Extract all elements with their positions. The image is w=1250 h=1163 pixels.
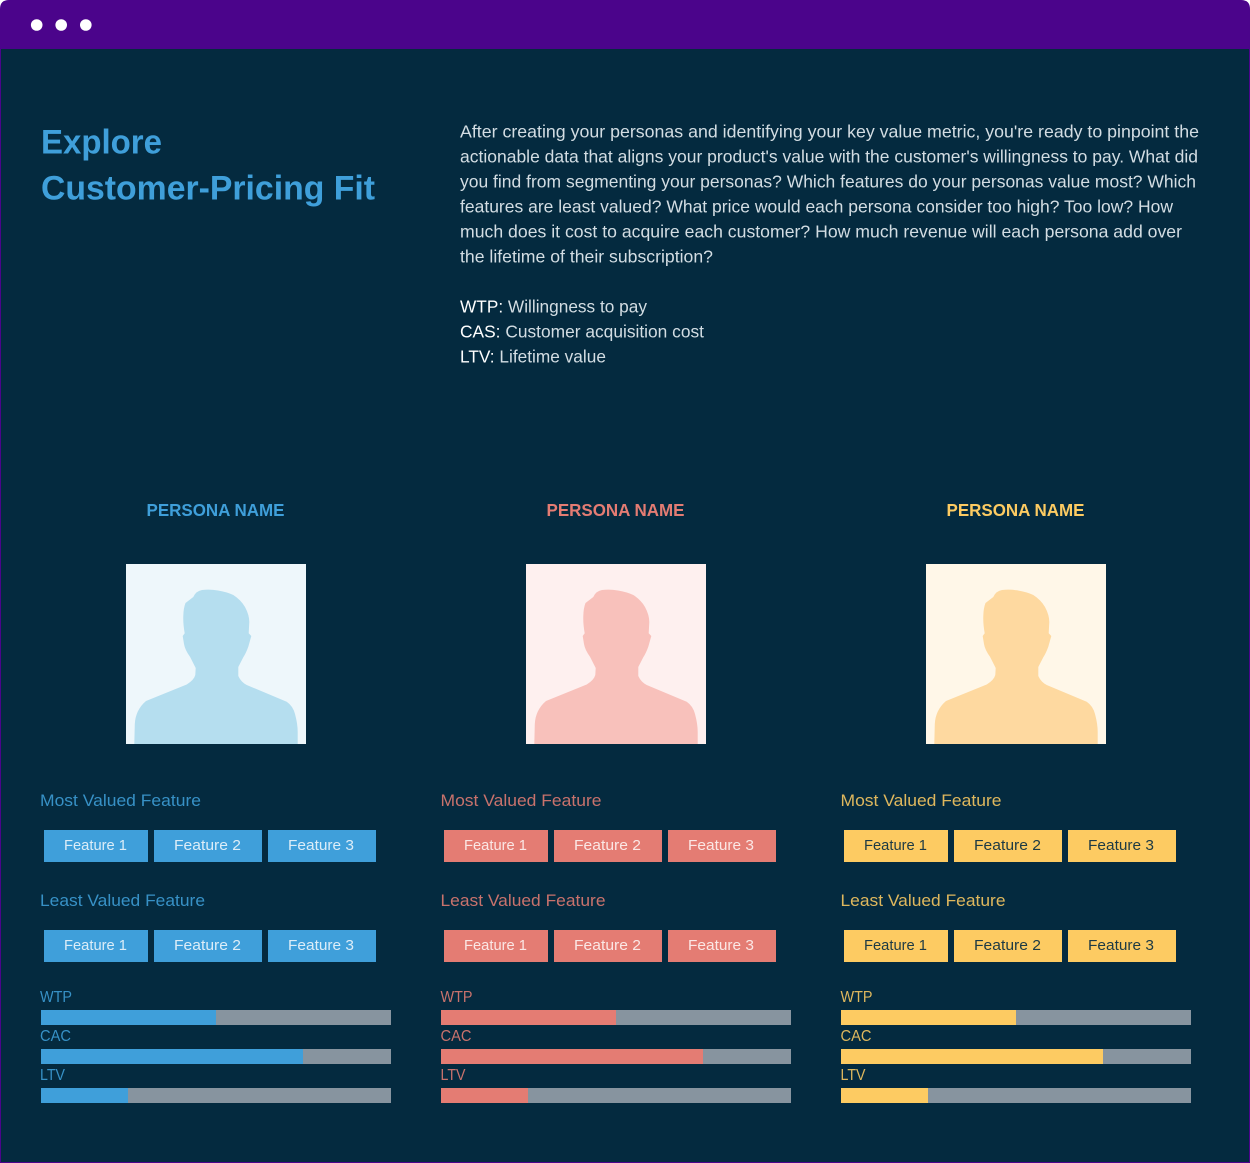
- metric bars: LTV: [840, 1067, 866, 1084]
- intro paragraph: After creating your personas and identifying your key value metric, you're ready to pinpoint the: [460, 122, 1199, 142]
- metric bars: WTP: [840, 989, 872, 1006]
- least valued buttons: Feature 3: [688, 937, 754, 954]
- metric bars: [440, 989, 791, 1103]
- title: [41, 124, 375, 208]
- glossary: LTV: Lifetime value: [460, 346, 606, 366]
- persona photo placeholder: [926, 564, 1106, 744]
- intro paragraph: much does it cost to acquire each customer? How much revenue will each persona add over: [460, 222, 1182, 242]
- most valued buttons: Feature 2: [574, 837, 641, 854]
- most valued buttons: Feature 1: [464, 837, 527, 854]
- panel: red persona: [440, 500, 791, 1103]
- panel: blue persona: [40, 500, 391, 1103]
- metric bars: CAC: [440, 1028, 472, 1045]
- least valued heading: Least Valued Feature: [840, 891, 1006, 910]
- metric bars: WTP: [440, 989, 472, 1006]
- most valued buttons: Feature 3: [688, 837, 754, 854]
- least valued heading: Least Valued Feature: [440, 891, 606, 910]
- least valued heading: Least Valued Feature: [40, 891, 205, 910]
- persona name: PERSONA NAME: [146, 500, 284, 520]
- most valued heading: Most Valued Feature: [40, 791, 201, 810]
- most valued buttons: Feature 1: [64, 837, 127, 854]
- least valued buttons: Feature 2: [574, 937, 641, 954]
- most valued buttons: Feature 2: [174, 837, 241, 854]
- intro paragraph: actionable data that aligns your product's value with the customer's willingness to pay. What did: [460, 146, 1198, 166]
- panel: yellow persona: [840, 500, 1191, 1103]
- most valued buttons: Feature 3: [288, 837, 354, 854]
- metric bars: [840, 989, 1191, 1103]
- glossary: CAS: Customer acquisition cost: [460, 322, 704, 342]
- intro paragraph: features are least valued? What price would each persona consider too high? Too low? How: [460, 196, 1173, 216]
- most valued buttons: [844, 830, 1176, 862]
- most valued buttons: [44, 830, 376, 862]
- least valued buttons: Feature 1: [64, 937, 127, 954]
- persona name: PERSONA NAME: [946, 500, 1084, 520]
- metric bars: WTP: [40, 989, 72, 1006]
- most valued buttons: Feature 2: [974, 837, 1041, 854]
- metric bars: CAC: [40, 1028, 71, 1045]
- persona photo placeholder: [526, 564, 706, 744]
- window control dots: [31, 19, 92, 31]
- most valued heading: Most Valued Feature: [840, 791, 1002, 810]
- most valued buttons: Feature 3: [1088, 837, 1154, 854]
- glossary: [460, 296, 704, 366]
- least valued buttons: Feature 1: [864, 937, 927, 954]
- most valued heading: Most Valued Feature: [440, 791, 602, 810]
- least valued buttons: [44, 930, 376, 962]
- persona name: PERSONA NAME: [546, 500, 684, 520]
- least valued buttons: Feature 2: [174, 937, 241, 954]
- intro paragraph: the lifetime of their subscription?: [460, 246, 713, 266]
- title: Customer-Pricing Fit: [41, 170, 375, 208]
- glossary: WTP: Willingness to pay: [460, 296, 647, 316]
- least valued buttons: Feature 3: [288, 937, 354, 954]
- least valued buttons: Feature 3: [1088, 937, 1154, 954]
- most valued buttons: Feature 1: [864, 837, 927, 854]
- least valued buttons: [844, 930, 1176, 962]
- metric bars: LTV: [440, 1067, 466, 1084]
- least valued buttons: [444, 930, 776, 962]
- metric bars: LTV: [40, 1067, 65, 1084]
- title: Explore: [41, 124, 162, 162]
- intro paragraph: [460, 122, 1199, 266]
- metric bars: [40, 989, 391, 1103]
- metric bars: CAC: [840, 1028, 872, 1045]
- least valued buttons: Feature 2: [974, 937, 1041, 954]
- most valued buttons: [444, 830, 776, 862]
- least valued buttons: Feature 1: [464, 937, 527, 954]
- persona photo placeholder: [126, 564, 306, 744]
- intro paragraph: you find from segmenting your personas? Which features do your personas value most? Which: [460, 172, 1196, 192]
